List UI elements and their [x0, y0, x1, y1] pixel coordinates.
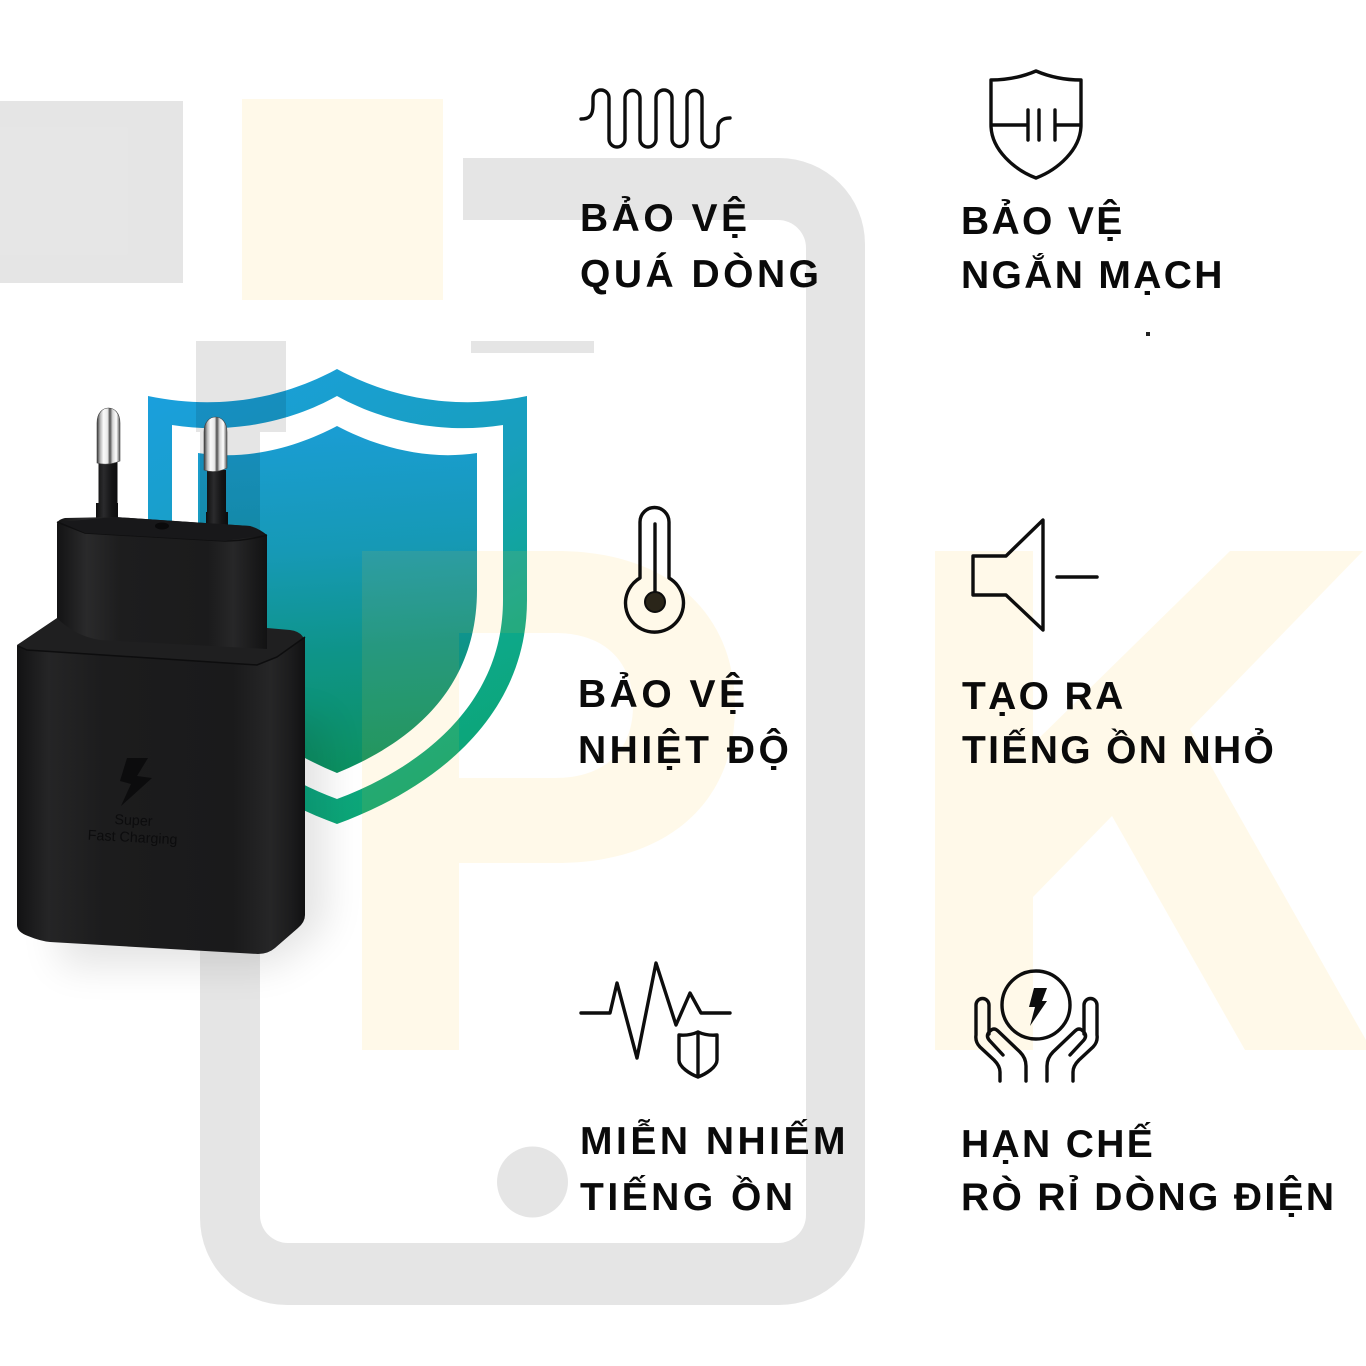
feature: temperature protection	[578, 508, 792, 772]
heading: temperature: NHIỆT ĐỘ	[578, 727, 792, 772]
icon: hands holding bolt	[976, 971, 1097, 1081]
icon: signal with shield	[581, 963, 730, 1077]
feature: leakage limit	[961, 971, 1336, 1219]
watermark: cream letters	[242, 99, 1366, 1050]
feature: low noise	[962, 520, 1276, 772]
heading: leakage limit: HẠN CHẾ	[961, 1122, 1155, 1166]
feature: short circuit protection	[961, 71, 1225, 297]
watermark: phone logo gray shapes	[0, 101, 865, 1305]
charger logo text: Fast Charging	[87, 828, 178, 848]
feature: noise immunity	[580, 963, 849, 1219]
left pin	[96, 408, 120, 525]
charger logo text: Super	[114, 812, 153, 830]
feature: overcurrent protection	[580, 90, 822, 296]
heading: overcurrent: QUÁ DÒNG	[580, 252, 822, 296]
charger body top ledge	[17, 618, 305, 680]
charger neck	[57, 517, 267, 649]
icon: serpentine current wave	[581, 90, 730, 147]
lightning logo	[120, 758, 152, 806]
stray dot	[1146, 332, 1150, 336]
shield graphic	[148, 369, 527, 824]
icon: speaker with minus	[973, 520, 1097, 630]
heading: noise immunity: TIẾNG ỒN	[580, 1175, 797, 1219]
heading: short circuit: NGẮN MẠCH	[961, 253, 1225, 297]
charger logo text	[87, 811, 179, 848]
heading: temperature: BẢO VỆ	[578, 672, 749, 716]
heading: low noise: TIẾNG ỒN NHỎ	[962, 728, 1276, 772]
charger shadow	[60, 720, 325, 965]
heading: low noise: TẠO RA	[962, 675, 1126, 718]
charger body	[17, 637, 305, 954]
heading: noise immunity: MIỄN NHIẾM	[580, 1119, 849, 1163]
icon: thermometer	[626, 508, 684, 632]
right pin	[204, 417, 228, 535]
icon: shield with capacitor	[991, 71, 1081, 178]
charger product	[17, 408, 305, 954]
heading: short circuit: BẢO VỆ	[961, 199, 1125, 243]
heading: leakage limit: RÒ RỈ DÒNG ĐIỆN	[961, 1175, 1336, 1219]
heading: overcurrent: BẢO VỆ	[580, 196, 751, 240]
